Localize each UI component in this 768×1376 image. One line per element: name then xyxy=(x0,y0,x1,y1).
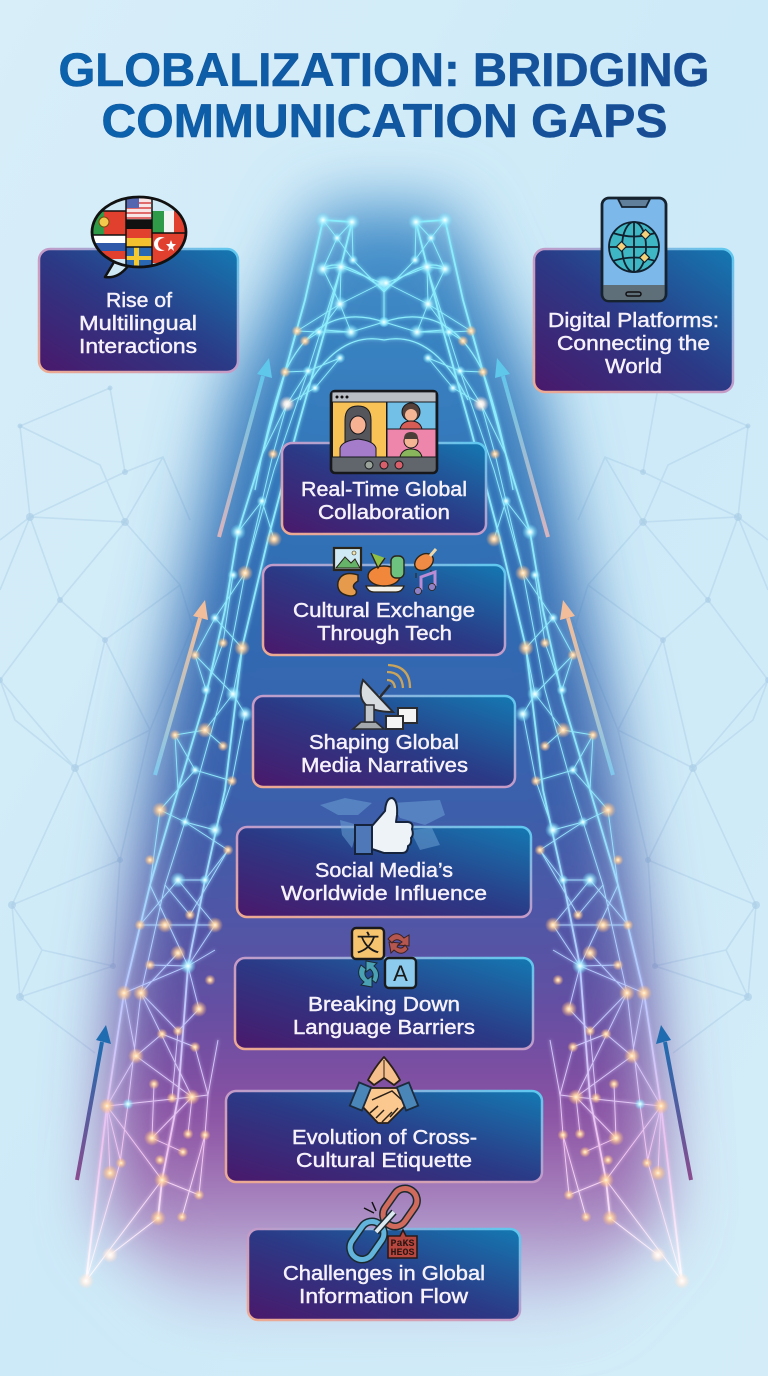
icon: culture collage xyxy=(334,548,436,596)
label: Media Narratives xyxy=(301,755,468,777)
arrow: lower right xyxy=(656,1025,691,1180)
icon: smartphone with globe xyxy=(602,198,666,301)
label xyxy=(293,600,475,645)
icon: broken chain and news tag: HEOS xyxy=(390,1248,415,1259)
icon: video call window xyxy=(331,391,437,473)
icon: broken chain and news tag xyxy=(345,1184,422,1264)
panel: evolution of cross-cultural etiquette xyxy=(226,1057,542,1182)
label: Evolution of Cross- xyxy=(292,1127,477,1149)
panel: digital platforms xyxy=(534,198,733,392)
label: Cultural Etiquette xyxy=(296,1150,472,1172)
label: Interactions xyxy=(79,336,197,358)
icon: flag speech bubble xyxy=(90,195,190,277)
panel: breaking down language barriers xyxy=(235,928,533,1049)
label: Challenges in Global xyxy=(283,1263,485,1285)
panel: rise of multilingual interactions xyxy=(39,195,238,372)
central glow xyxy=(103,205,665,1305)
label xyxy=(548,310,719,378)
icon: translate symbols: 文 xyxy=(356,930,380,956)
icon: broken chain and news tag: PaKS xyxy=(390,1239,415,1250)
label xyxy=(79,290,197,358)
label: Shaping Global xyxy=(309,732,459,754)
label: Digital Platforms: xyxy=(548,310,719,332)
label: Breaking Down xyxy=(308,994,460,1016)
label: Cultural Exchange xyxy=(293,600,475,622)
label: Collaboration xyxy=(318,502,450,524)
label xyxy=(301,732,468,777)
arrow: lower left xyxy=(77,1025,111,1180)
faint side networks xyxy=(0,386,768,1053)
icon: translate symbols: A xyxy=(393,961,408,986)
title: GLOBALIZATION: BRIDGING xyxy=(58,43,709,96)
icon: praying hands and handshake xyxy=(350,1057,418,1123)
title: COMMUNICATION GAPS xyxy=(102,94,668,147)
label: Connecting the xyxy=(557,333,710,355)
label: World xyxy=(605,356,662,378)
icon: satellite dish and screens xyxy=(353,665,417,729)
panel: shaping global media narratives xyxy=(253,665,515,787)
arrow: upper left xyxy=(219,358,272,537)
title xyxy=(58,43,709,147)
label: Multilingual xyxy=(79,313,197,335)
icon: translate symbols xyxy=(352,928,416,988)
label xyxy=(281,860,487,905)
label: Real-Time Global xyxy=(301,479,467,501)
arrow: middle right xyxy=(560,600,613,775)
label xyxy=(293,994,475,1039)
label xyxy=(292,1127,477,1172)
bridge network xyxy=(78,212,690,1289)
label: Rise of xyxy=(106,290,172,312)
panel: cultural exchange through tech xyxy=(263,548,505,655)
label: Through Tech xyxy=(317,623,452,645)
label: Language Barriers xyxy=(293,1017,475,1039)
arrow: middle left xyxy=(155,600,208,775)
label xyxy=(301,479,467,524)
label: Worldwide Influence xyxy=(281,883,487,905)
panel: challenges in global information flow xyxy=(248,1184,520,1320)
icon: world map and thumbs up xyxy=(320,798,445,854)
panel: social media's worldwide influence xyxy=(237,798,531,917)
label xyxy=(283,1263,485,1308)
panel: real-time global collaboration xyxy=(282,391,486,534)
label: Information Flow xyxy=(299,1286,469,1308)
label: Social Media’s xyxy=(315,860,453,882)
arrow: upper right xyxy=(495,358,548,537)
